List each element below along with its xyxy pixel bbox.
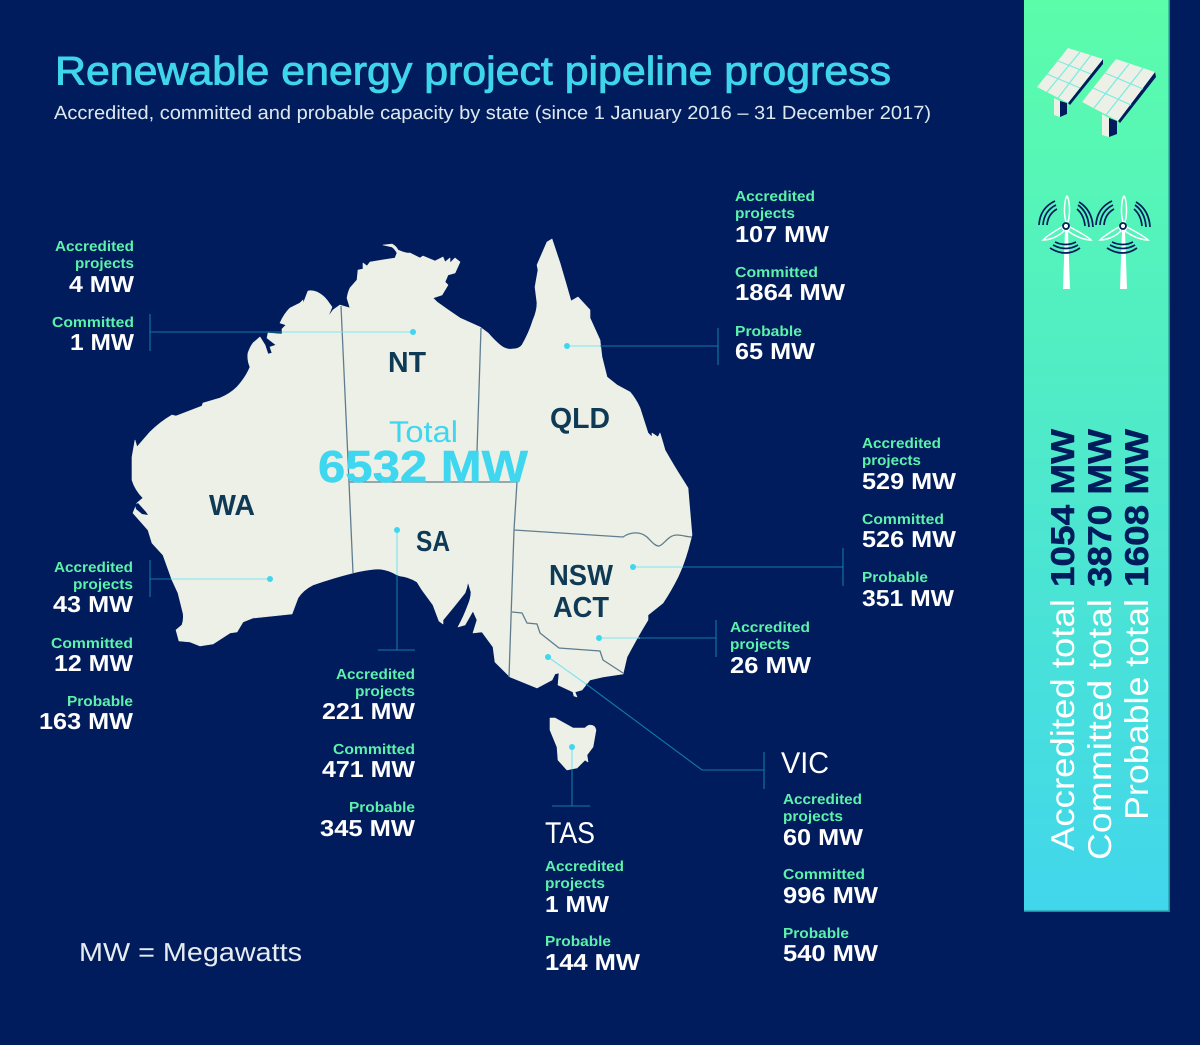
data: NSW [862, 436, 956, 611]
data: QLD: 107 MW [735, 221, 829, 247]
leader: VIC [545, 654, 764, 789]
data: TAS: 144 MW [545, 949, 640, 975]
data: SA: Accredited [336, 667, 415, 683]
leader: NSW [630, 548, 843, 586]
mainland [132, 239, 692, 697]
state label: QLD: QLD [550, 403, 610, 435]
state label: ACT: ACT [553, 592, 609, 624]
data: NT: Accredited [55, 239, 134, 255]
total: accredited: Accredited total [1044, 599, 1081, 851]
state label: SA: SA [416, 526, 450, 558]
data: VIC: Probable [783, 926, 849, 942]
Tasmania [550, 718, 596, 770]
data: QLD: projects [735, 206, 795, 222]
data: ACT [730, 620, 811, 678]
leader: TAS [552, 744, 590, 806]
total: probable: 1608 MW [1118, 428, 1155, 587]
data: NT: projects [75, 256, 134, 272]
data: QLD: Accredited [735, 189, 815, 205]
data: SA [320, 667, 415, 841]
data: VIC: 540 MW [783, 940, 878, 966]
icon: solar panels [1037, 48, 1156, 137]
data: WA: projects [73, 577, 133, 593]
data: NSW: projects [862, 453, 921, 469]
data: WA: 12 MW [54, 650, 133, 676]
data: ACT: 26 MW [730, 652, 811, 678]
data: WA: 163 MW [39, 708, 133, 734]
total: probable [1118, 428, 1155, 820]
Shark Bay inlet [135, 503, 148, 515]
data: NT [52, 239, 134, 355]
leader: ACT [596, 620, 716, 657]
side panel [1024, 0, 1170, 912]
data: SA: 221 MW [322, 698, 415, 724]
data: WA: Committed [51, 636, 133, 652]
data: VIC [781, 747, 878, 966]
data: WA [39, 560, 133, 734]
data: NSW: Accredited [862, 436, 941, 452]
leader: QLD [564, 328, 718, 365]
data: TAS: Accredited [545, 859, 624, 875]
data: SA: Probable [349, 800, 415, 816]
total: probable: Probable total [1118, 599, 1155, 820]
leader: WA [150, 560, 273, 597]
total label: 6532 MW [318, 441, 529, 492]
data: VIC: projects [783, 809, 843, 825]
state label: NSW: NSW [549, 560, 614, 592]
data: TAS: TAS [545, 817, 595, 850]
data: ACT: projects [730, 637, 790, 653]
data: WA: 43 MW [53, 591, 133, 617]
data: SA: projects [355, 684, 415, 700]
total: accredited: 1054 MW [1044, 428, 1081, 587]
data: QLD: Probable [735, 324, 802, 340]
data: WA: Accredited [54, 560, 133, 576]
total label [318, 416, 529, 492]
data: NSW: 351 MW [862, 585, 954, 611]
data: QLD: 65 MW [735, 338, 815, 364]
data: ACT: Accredited [730, 620, 810, 636]
data: NSW: Committed [862, 512, 944, 528]
icon: wind turbines [1039, 196, 1150, 289]
leader: SA [378, 527, 415, 650]
state label: NT: NT [388, 347, 426, 379]
total label: Total [389, 416, 458, 449]
data: VIC: Accredited [783, 792, 862, 808]
data: QLD: Committed [735, 265, 818, 281]
data: VIC: Committed [783, 867, 865, 883]
data: TAS: projects [545, 876, 605, 892]
leader: NT [150, 314, 416, 351]
data: QLD: 1864 MW [735, 279, 845, 305]
state borders [341, 306, 692, 677]
data: NT: Committed [52, 315, 134, 331]
data: SA: Committed [333, 742, 415, 758]
data: VIC: 60 MW [783, 824, 863, 850]
map of Australia [132, 239, 692, 770]
total: committed: Committed total [1081, 599, 1118, 860]
data: NT: 1 MW [70, 329, 134, 355]
total: accredited [1044, 428, 1081, 851]
data: TAS [545, 817, 640, 975]
data: NT: 4 MW [69, 271, 134, 297]
data: SA: 345 MW [320, 815, 415, 841]
title: Renewable energy project pipeline progress [55, 50, 891, 94]
data: NSW: 526 MW [862, 526, 956, 552]
total: committed [1081, 428, 1118, 860]
data: TAS: 1 MW [545, 891, 609, 917]
state label: WA: WA [209, 490, 255, 522]
data: VIC: 996 MW [783, 882, 878, 908]
data: WA: Probable [67, 694, 133, 710]
data: SA: 471 MW [322, 756, 415, 782]
data: VIC: VIC [781, 747, 829, 780]
data: TAS: Probable [545, 934, 611, 950]
subtitle: Accredited, committed and probable capacity by state (since 1 January 2016 – 31 December 2017) [54, 103, 931, 124]
data: QLD [735, 189, 845, 364]
data: NSW: Probable [862, 570, 928, 586]
unit note: MW = Megawatts [79, 937, 302, 967]
total: committed: 3870 MW [1081, 428, 1118, 587]
data: NSW: 529 MW [862, 468, 956, 494]
